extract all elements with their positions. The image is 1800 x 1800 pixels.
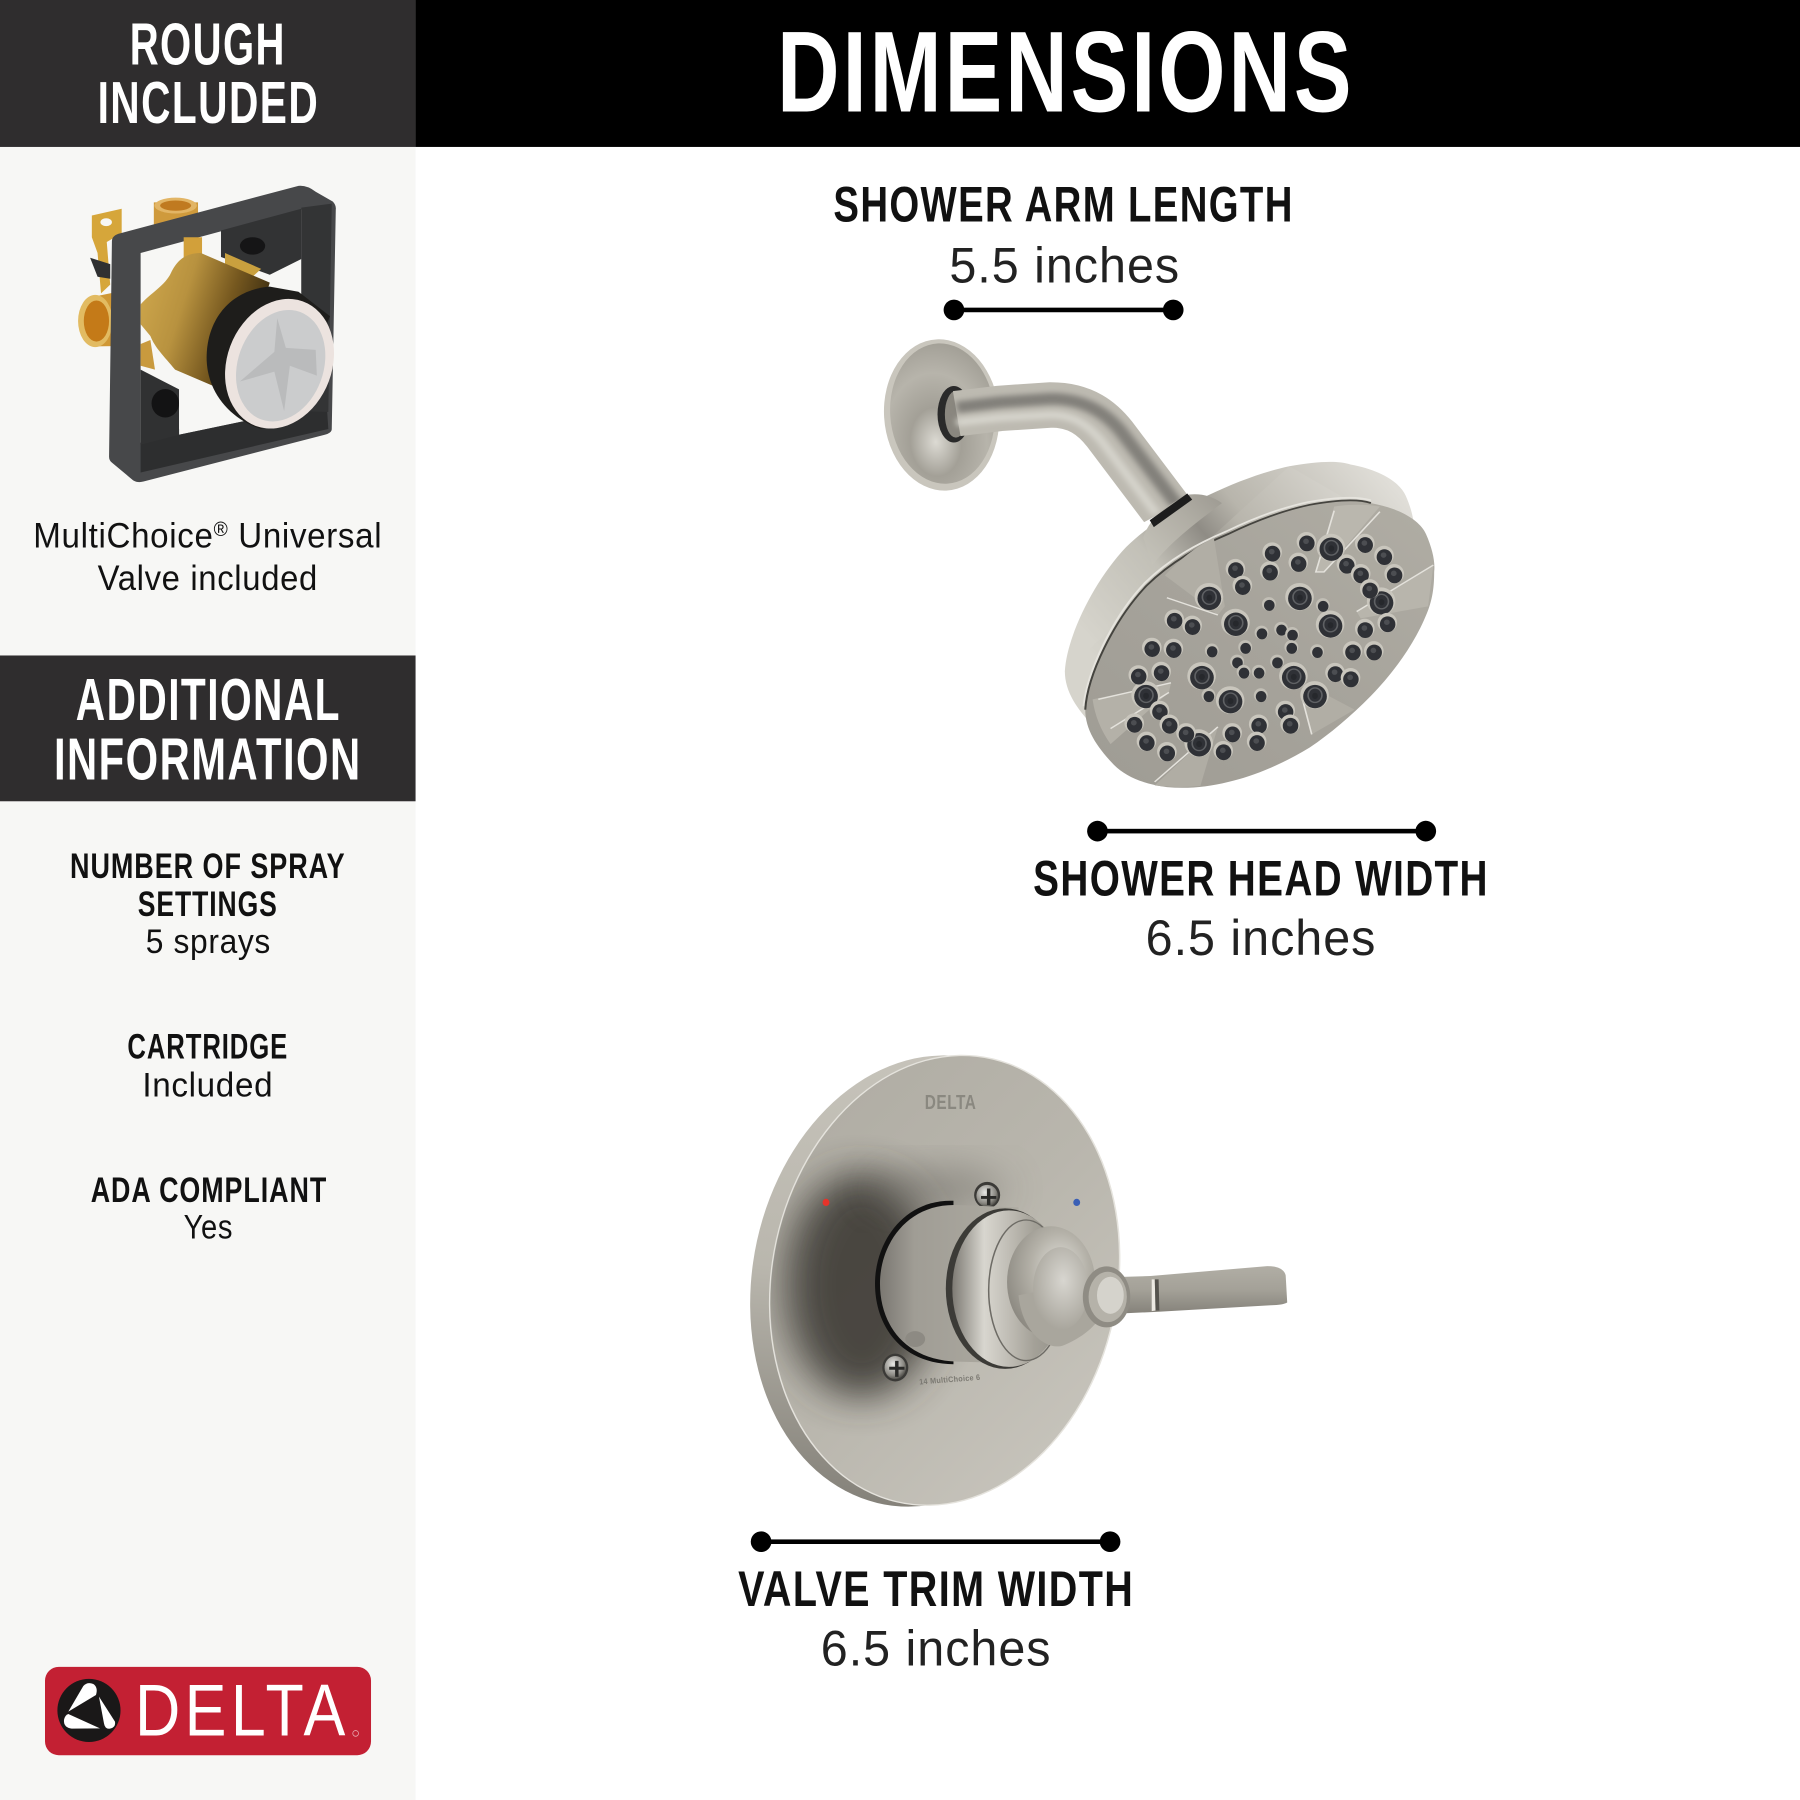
cold indicator	[1073, 1199, 1080, 1206]
heading: rough included: INCLUDED	[98, 69, 319, 136]
spec: spray settings: SETTINGS	[138, 884, 278, 924]
hot indicator	[823, 1199, 829, 1206]
dimension line: valve trim	[751, 1531, 1120, 1552]
label: shower arm length: 5.5 inches	[949, 236, 1180, 293]
label: shower arm length: SHOWER ARM LENGTH	[833, 176, 1294, 233]
sector wedges	[1093, 505, 1433, 787]
escutcheon cylinder	[875, 1201, 1019, 1364]
dimension line: shower head	[1087, 821, 1436, 841]
spec: ada compliant: Yes	[184, 1209, 233, 1247]
caption: valve	[33, 516, 382, 598]
caption: valve: MultiChoice	[33, 516, 227, 556]
spec: cartridge: Included	[142, 1066, 273, 1104]
panel: sidebar	[0, 0, 416, 1800]
heading: additional information	[0, 655, 416, 801]
caption: valve: ®	[214, 518, 228, 541]
illustration: shower head and arm	[879, 337, 1434, 788]
spec: ada compliant	[91, 1170, 327, 1247]
handle lever	[1118, 1266, 1287, 1314]
shower arm	[957, 399, 1177, 514]
banner: dimensions	[416, 0, 1800, 147]
caption: valve: Valve included	[98, 558, 318, 598]
brand mark: DELTA	[925, 1090, 976, 1114]
dimension line: shower arm	[944, 300, 1184, 320]
valve frame	[109, 186, 336, 482]
illustration: valve trim	[750, 1054, 1288, 1507]
spray nozzles	[1124, 532, 1404, 761]
bottom screw	[882, 1354, 908, 1381]
trim plate	[750, 1054, 1120, 1507]
model text: 14 MultiChoice 6	[919, 1372, 981, 1386]
top screw	[974, 1182, 1000, 1208]
spec: spray settings: NUMBER OF SPRAY	[70, 846, 346, 886]
collar	[946, 1208, 1066, 1369]
heading: additional information: ADDITIONAL	[76, 666, 341, 733]
heading: rough included: ROUGH	[130, 10, 286, 77]
heading: rough included	[0, 0, 416, 147]
label: shower head width: 6.5 inches	[1146, 909, 1376, 966]
knob neck	[1083, 1266, 1130, 1327]
caption: valve: Universal	[228, 516, 382, 556]
spec: spray settings	[70, 846, 346, 961]
banner: dimensions: DIMENSIONS	[777, 8, 1355, 136]
label: shower head width: SHOWER HEAD WIDTH	[1033, 849, 1489, 906]
spec: spray settings: 5 sprays	[146, 923, 271, 961]
logo: delta	[45, 1667, 371, 1755]
heading: additional information: INFORMATION	[54, 725, 362, 792]
spec: ada compliant: ADA COMPLIANT	[91, 1170, 327, 1210]
label: shower head width	[1033, 849, 1489, 966]
label: shower arm length	[833, 176, 1294, 293]
spec: cartridge	[127, 1026, 288, 1104]
label: valve trim width: 6.5 inches	[821, 1620, 1052, 1677]
shower head body	[1065, 462, 1434, 749]
label: valve trim width: VALVE TRIM WIDTH	[738, 1560, 1134, 1617]
shower head face	[1084, 498, 1434, 788]
flange	[879, 337, 1004, 493]
label: valve trim width	[738, 1560, 1134, 1677]
icon: rough-in valve	[78, 186, 346, 482]
logo: delta: DELTA	[135, 1669, 350, 1752]
spec: cartridge: CARTRIDGE	[127, 1026, 288, 1066]
dome	[1007, 1226, 1103, 1346]
